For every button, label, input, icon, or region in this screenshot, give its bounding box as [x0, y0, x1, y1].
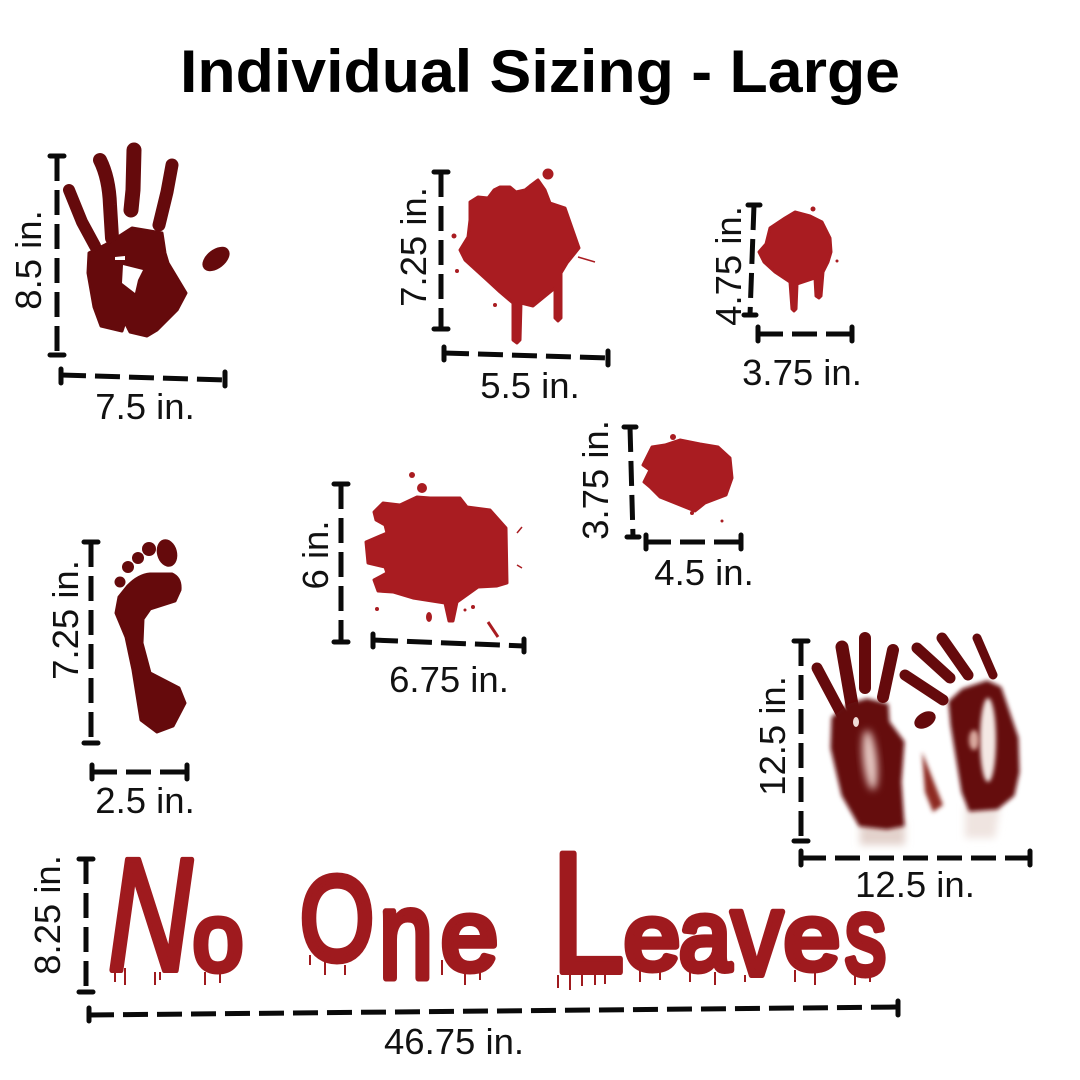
bloody lettering: O: [300, 852, 374, 986]
icon: handprint: [69, 150, 232, 336]
handprint with dimensions: [8, 150, 232, 427]
width dimension: [92, 765, 187, 779]
width dimension: [758, 327, 852, 341]
height dimension: [334, 484, 348, 642]
height label: 6 in.: [295, 520, 336, 590]
icon: splatter with drips: [452, 170, 595, 343]
bloody lettering: N: [108, 825, 192, 1004]
width label: 7.5 in.: [95, 386, 195, 427]
height dimension: [794, 641, 808, 841]
height label: 3.75 in.: [575, 420, 616, 540]
No One Leaves lettering with dimensions: [27, 817, 898, 1062]
height dimension: [744, 205, 760, 315]
width dimension: [89, 1001, 898, 1021]
wide small splatter with dimensions: [575, 420, 754, 593]
title: Individual Sizing - Large: [180, 38, 900, 105]
bloody lettering: n: [379, 866, 433, 1005]
height dimension: [50, 156, 64, 355]
width label: 4.5 in.: [654, 552, 754, 593]
width dimension: [801, 851, 1030, 865]
width dimension: [444, 347, 608, 365]
height label: 8.25 in.: [27, 855, 68, 975]
icon: footprint: [114, 537, 185, 732]
pair of smeared hands with dimensions: [752, 638, 1030, 905]
icon: wide small splatter: [643, 434, 732, 522]
width dimension: [61, 369, 225, 386]
height dimension: [84, 542, 98, 743]
width label: 3.75 in.: [742, 352, 862, 393]
bloody lettering: [108, 817, 886, 1009]
height dimension: [624, 427, 639, 537]
height label: 4.75 in.: [708, 206, 749, 326]
height label: 12.5 in.: [752, 676, 793, 796]
height dimension: [79, 859, 93, 992]
icon: small splatter: [759, 206, 838, 311]
width dimension: [646, 535, 741, 549]
height label: 7.25 in.: [45, 560, 86, 680]
bloody lettering: e: [624, 885, 680, 989]
drips: [115, 955, 870, 990]
bloody lettering: L: [551, 817, 625, 1009]
height dimension: [434, 172, 448, 329]
icon: medium splatter: [366, 472, 522, 637]
height label: 8.5 in.: [8, 210, 49, 310]
width label: 6.75 in.: [389, 659, 509, 700]
width dimension: [373, 634, 524, 652]
medium splatter with dimensions: [295, 472, 524, 700]
width label: 5.5 in.: [480, 365, 580, 406]
bloody lettering: a: [679, 880, 731, 992]
bloody lettering: v: [731, 867, 783, 1001]
width label: 2.5 in.: [95, 780, 195, 821]
footprint with dimensions: [45, 537, 195, 821]
bloody lettering: e: [441, 880, 498, 992]
bloody lettering: s: [845, 875, 886, 998]
small drip splatter with dimensions: [708, 205, 862, 393]
large drip splatter with dimensions: [393, 170, 608, 406]
width label: 46.75 in.: [384, 1021, 524, 1062]
icon: smeared hands: [817, 638, 1018, 845]
width label: 12.5 in.: [855, 864, 975, 905]
height label: 7.25 in.: [393, 187, 434, 307]
bloody lettering: o: [193, 885, 243, 991]
bloody lettering: e: [784, 885, 840, 989]
